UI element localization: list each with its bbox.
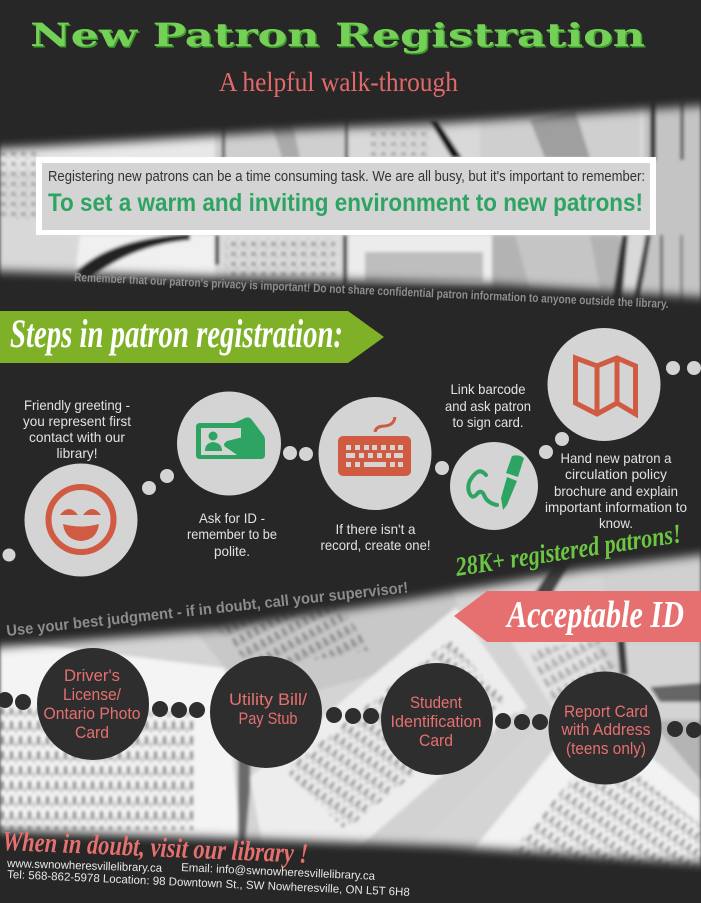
step 2: ask for ID xyxy=(177,392,281,559)
ID type: student card: Card xyxy=(419,731,453,750)
icon: hand holding ID card xyxy=(196,417,265,459)
photo band: open books (top) xyxy=(0,98,701,304)
step 2 text: polite. xyxy=(214,543,250,559)
title xyxy=(30,16,646,56)
footer contact details: www.swnowheresvillelibrary.ca xyxy=(6,858,163,875)
step 4: link barcode and sign card xyxy=(445,381,538,530)
step 1 text: contact with our xyxy=(29,429,125,445)
step 5 text xyxy=(545,450,687,531)
step 3 text: record, create one! xyxy=(320,537,430,553)
ID type: report card: with Address xyxy=(561,720,650,739)
step 3 text xyxy=(320,521,430,553)
step 5 text: brochure and explain xyxy=(554,483,678,499)
ID type: student card: Identification xyxy=(390,712,482,731)
step 4 text: and ask patron xyxy=(445,398,531,414)
step 3 text: If there isn't a xyxy=(336,521,416,537)
step 5 text: know. xyxy=(599,515,633,531)
step 1 text: you represent first xyxy=(23,413,131,429)
step 3: create record xyxy=(318,397,432,553)
dots connecting ID types xyxy=(0,692,701,738)
dots connecting steps xyxy=(2,361,701,562)
step 2 text: Ask for ID - xyxy=(199,510,265,526)
banner: acceptable ID xyxy=(454,591,701,642)
ID type: utility bill: Pay Stub xyxy=(238,709,298,728)
icon: smiling face xyxy=(48,487,114,552)
step 1 text xyxy=(23,397,131,461)
ID type: report card: (teens only) xyxy=(566,739,646,758)
ID type: driver's license: Card xyxy=(75,723,109,742)
ID type: report card: Report Card xyxy=(564,702,648,721)
key message: To set a warm and inviting environment to new patrons! xyxy=(48,189,643,217)
step 2 text: remember to be xyxy=(187,526,277,542)
step 4 text: Link barcode xyxy=(450,381,526,397)
icon: pen and signature xyxy=(468,455,524,510)
step 5 text: important information to xyxy=(545,499,687,515)
step 1: friendly greeting xyxy=(23,397,138,576)
judgment note: Use your best judgment - if in doubt, call your supervisor! xyxy=(6,579,409,640)
step 5 text: Hand new patron a xyxy=(560,450,672,466)
ID type: utility bill: Utility Bill/ xyxy=(229,690,307,709)
step 1 text: library! xyxy=(56,445,98,461)
title: New Patron Registration xyxy=(30,16,645,54)
step 4 text: to sign card. xyxy=(452,414,524,430)
title: New Patron Registration xyxy=(32,18,646,56)
ID type: report card xyxy=(548,672,662,784)
intro sentence: Registering new patrons can be a time consuming task. We are all busy, but it's important to remember: xyxy=(48,169,645,185)
panel: intro callout xyxy=(36,157,656,235)
icon: keyboard xyxy=(338,417,411,476)
icon: folded map xyxy=(576,358,636,414)
photo band: open books (bottom) xyxy=(0,530,701,880)
step 4 text xyxy=(445,381,531,430)
ID type: student card xyxy=(381,663,493,775)
footer contact details: Email: info@swnowheresvillelibrary.ca xyxy=(181,862,376,883)
step 2 text xyxy=(187,510,277,559)
banner: steps in patron registration: Steps in patron registration: xyxy=(10,311,343,356)
ID type: student card: Student xyxy=(410,693,462,712)
ID type: driver's license: License/ xyxy=(63,685,121,704)
ID type: driver's license: Driver's xyxy=(64,666,120,685)
footer heading: When in doubt, visit our library ! xyxy=(2,826,309,870)
subtitle: A helpful walk-through xyxy=(219,67,458,97)
step 5 text: circulation policy xyxy=(565,466,667,482)
step 5: circulation brochure xyxy=(545,328,687,531)
ID type: driver's license: Ontario Photo xyxy=(44,704,140,723)
step 1 text: Friendly greeting - xyxy=(24,397,130,413)
ID type: driver's license xyxy=(37,648,149,760)
ID type: utility bill xyxy=(210,656,322,768)
footer contact details: Tel: 568-862-5978 Location: 98 Downtown St., SW Nowheresville, ON L5T 6H8 xyxy=(7,869,410,899)
